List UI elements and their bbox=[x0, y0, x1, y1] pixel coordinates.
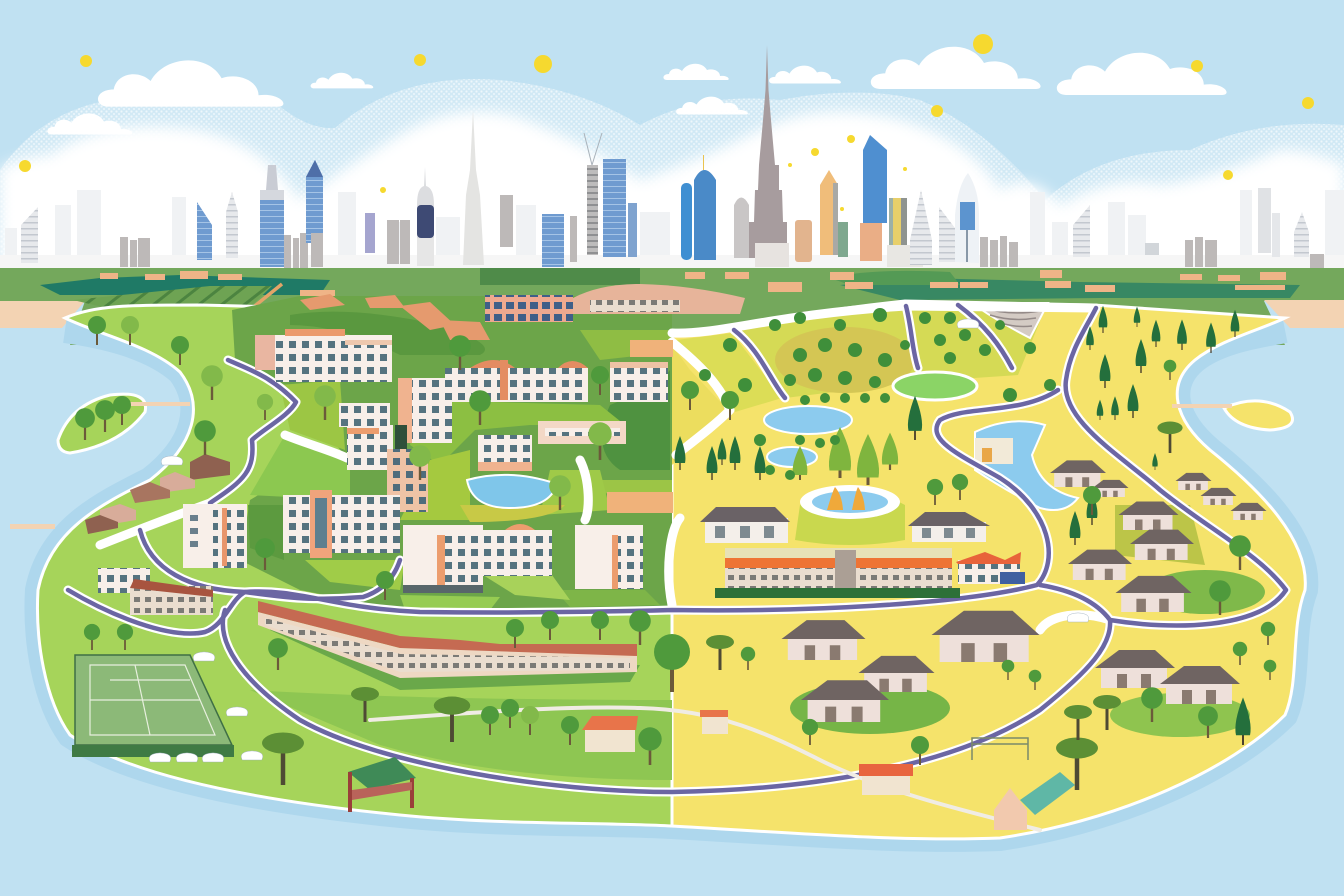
coastal water halo bbox=[37, 330, 1305, 839]
pond one bbox=[764, 406, 852, 434]
striped tower bbox=[887, 198, 923, 267]
white lanes bbox=[285, 306, 1110, 630]
fences bbox=[607, 340, 673, 513]
darker distant forest strip bbox=[40, 268, 1300, 300]
sky clouds bbox=[47, 47, 1227, 134]
houses: west shoreline bbox=[85, 454, 230, 534]
small red kiosk bbox=[859, 764, 913, 795]
upper park left bbox=[676, 333, 782, 412]
yellow sun dots bbox=[19, 34, 1314, 253]
tallest spire tower bbox=[749, 45, 787, 258]
long orange roof building bbox=[715, 548, 960, 598]
terrace hedge bbox=[270, 620, 640, 690]
midground green band bbox=[0, 268, 1344, 345]
islet left bbox=[58, 394, 146, 453]
tennis court bbox=[72, 655, 234, 757]
orange farm track bbox=[208, 284, 282, 340]
long terrace bbox=[258, 601, 640, 690]
round lawn bbox=[893, 372, 977, 400]
white cloud bank behind skyline bbox=[0, 112, 1344, 272]
trees bbox=[84, 306, 1276, 790]
island base bbox=[37, 296, 1305, 839]
green villas patch bbox=[1115, 505, 1205, 565]
block: upper cluster bbox=[398, 360, 588, 443]
island: green half bbox=[37, 305, 672, 826]
grey low towers bbox=[120, 195, 1324, 268]
skyline bbox=[0, 45, 1344, 269]
small house: orange roof bbox=[582, 716, 638, 752]
dark shaded gap bbox=[395, 425, 407, 449]
small islets bbox=[10, 394, 1292, 529]
white needle tower bbox=[463, 110, 484, 265]
lawn at lower road bbox=[250, 690, 672, 780]
dark banded tower bbox=[417, 167, 434, 266]
pale background towers bbox=[5, 190, 1344, 266]
road casing bbox=[68, 305, 1286, 792]
lawn goal frame bbox=[972, 738, 1028, 760]
house lawn far right bbox=[1145, 570, 1265, 614]
yellow side trees bbox=[675, 306, 1276, 790]
small orange house bbox=[700, 710, 728, 734]
grey-blue spired tower bbox=[260, 165, 284, 267]
blue spired tower bbox=[306, 160, 323, 243]
speech markers bbox=[149, 319, 1089, 762]
apartment blocks left bbox=[85, 284, 745, 812]
blue crown tower bbox=[694, 155, 716, 260]
footpaths bbox=[370, 707, 1040, 830]
buildings right bbox=[700, 460, 1266, 830]
road surface bbox=[68, 305, 1286, 792]
block: south row bbox=[403, 524, 643, 593]
block: upper right bbox=[610, 362, 668, 402]
farm fields bbox=[73, 286, 272, 335]
orchard soil bbox=[775, 327, 915, 393]
left jetty bbox=[10, 524, 55, 529]
near white base strip bbox=[0, 255, 1344, 269]
sand beaches bbox=[0, 300, 1344, 328]
island: yellow half bbox=[672, 301, 1305, 839]
pond two bbox=[767, 447, 817, 467]
distant peach roofs bbox=[100, 270, 1286, 322]
house lawn right bbox=[1110, 693, 1250, 737]
house: gabled east bbox=[908, 512, 990, 542]
amphitheatre bbox=[972, 303, 1048, 338]
upper park band bbox=[735, 304, 1045, 398]
gazebo and teal roof bbox=[994, 772, 1075, 830]
central pool bbox=[467, 475, 557, 508]
block: west bbox=[183, 504, 247, 568]
parks and lakes bbox=[250, 372, 1265, 780]
house: gabled west bbox=[700, 507, 790, 543]
block: middle terrace bbox=[478, 421, 626, 471]
small hill roofs bbox=[300, 294, 490, 340]
hillside foliage bbox=[248, 312, 672, 610]
dark-roof villas bbox=[782, 460, 1266, 722]
white and blue tower bbox=[955, 173, 979, 263]
small colourful house bbox=[956, 552, 1025, 584]
crane tower bbox=[584, 133, 602, 255]
lower lawn under villas bbox=[790, 682, 950, 734]
block: middle tall bbox=[339, 403, 428, 512]
block: hill top bbox=[255, 329, 392, 382]
fountain plaza bbox=[795, 485, 905, 545]
pier left bbox=[130, 402, 190, 406]
orchard tree canopy bbox=[699, 308, 1056, 480]
central hillside greenery bbox=[232, 296, 672, 610]
islet right bbox=[1224, 401, 1292, 430]
green side trees bbox=[84, 316, 690, 785]
block: small west bbox=[98, 568, 213, 615]
pier right bbox=[1172, 404, 1232, 408]
lake bbox=[975, 421, 1078, 510]
block: arched bbox=[283, 490, 400, 558]
stippled cloud haze bbox=[0, 79, 1344, 270]
west lawn wedge bbox=[672, 345, 728, 465]
far hill blocks bbox=[485, 284, 745, 322]
road network bbox=[68, 305, 1286, 830]
blue and salmon tower bbox=[860, 135, 887, 261]
left towers bbox=[21, 207, 38, 263]
pavilion: green roof bbox=[348, 757, 416, 812]
